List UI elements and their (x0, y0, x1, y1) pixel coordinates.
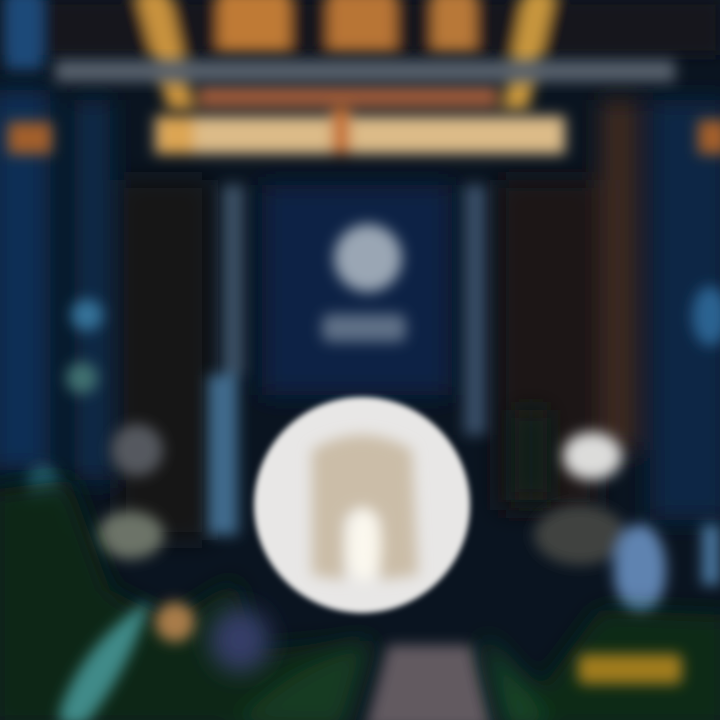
columns (208, 185, 486, 535)
wall lights right (534, 286, 720, 616)
cream sign band (155, 106, 565, 154)
central white circle with arch (254, 397, 470, 613)
wall lights left (28, 299, 164, 559)
grey horizontal band (55, 60, 675, 82)
foliage right (482, 410, 720, 720)
side orange lights (8, 120, 720, 154)
foliage left (0, 480, 372, 720)
wall panels (0, 90, 720, 540)
arch figure (312, 435, 418, 581)
teal leaf (60, 600, 150, 720)
orange lamp (155, 602, 195, 642)
purple-blue blur (210, 608, 270, 672)
ceiling with orange slats (0, 0, 720, 110)
logo: grey circle and caption (322, 224, 406, 342)
walkway (365, 645, 492, 720)
yellow sign (578, 654, 682, 684)
